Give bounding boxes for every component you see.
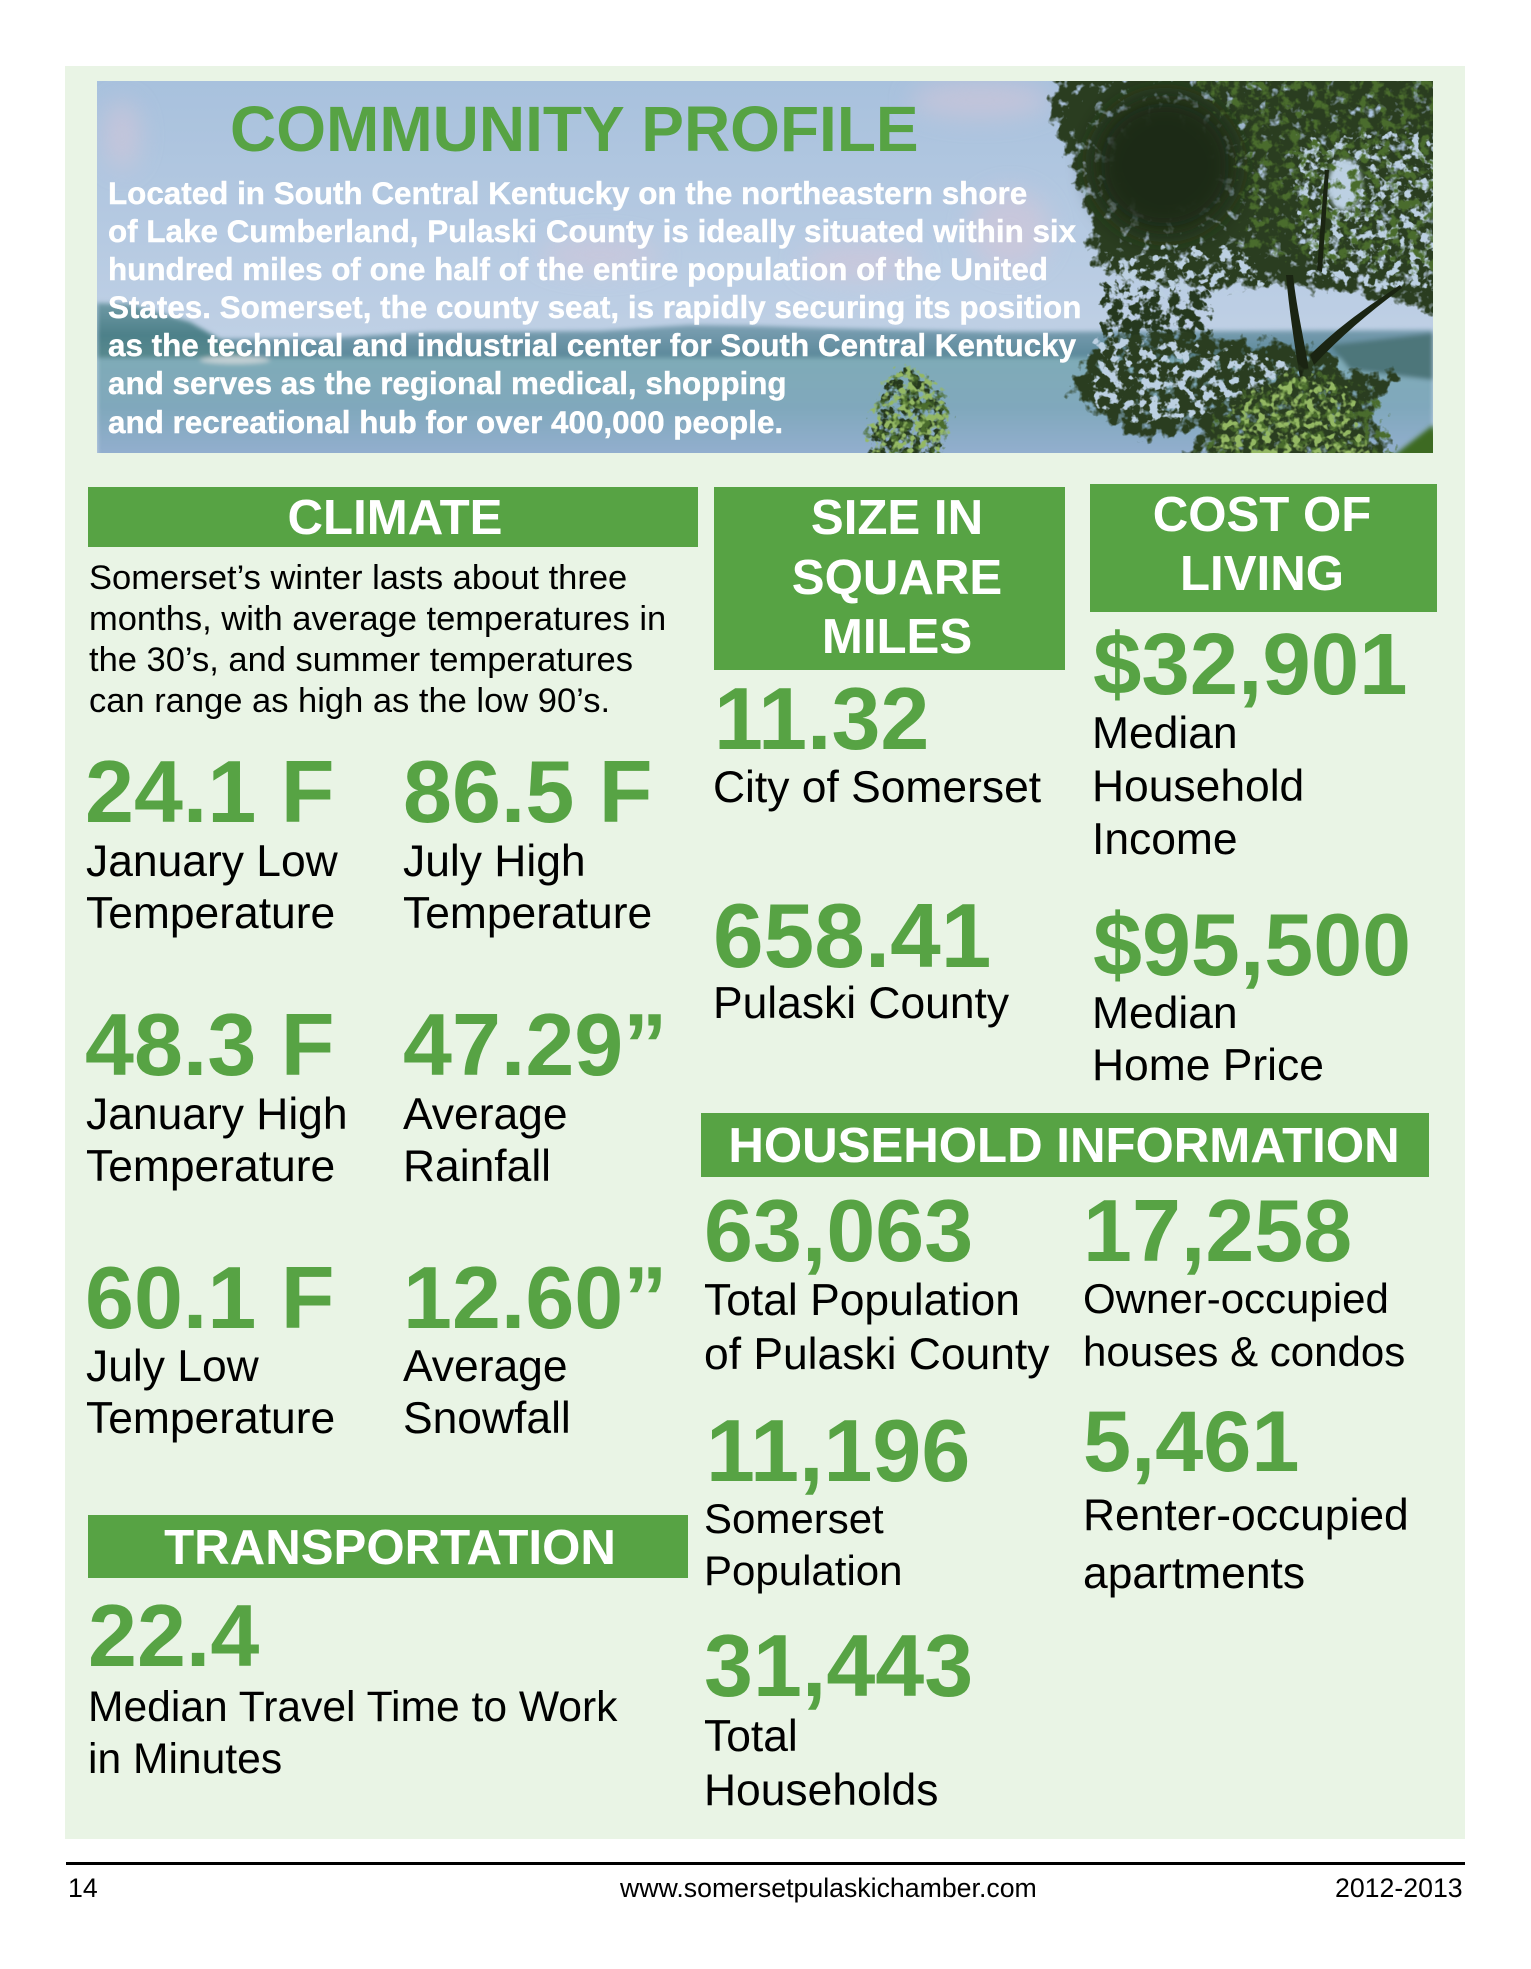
banner photo: lake and tree	[97, 81, 1433, 453]
stat: January high	[85, 995, 348, 1191]
intro paragraph	[108, 176, 1081, 440]
stat: total population: 63,063	[704, 1181, 973, 1280]
heading: cost of living: LIVING	[1180, 546, 1344, 601]
stat: owner-occupied: 17,258	[1083, 1181, 1352, 1280]
stat: July high: Temperature	[403, 889, 652, 938]
stat: travel time: in Minutes	[88, 1735, 282, 1783]
stat: July low: 60.1 F	[85, 1248, 334, 1347]
stat: household income	[1092, 616, 1407, 864]
stat: total households	[704, 1616, 973, 1815]
stat: total households: 31,443	[704, 1616, 973, 1715]
stat: July low	[85, 1248, 335, 1443]
stat: total population: of Pulaski County	[704, 1330, 1050, 1379]
heading: household information: HOUSEHOLD INFORMATION	[728, 1118, 1400, 1173]
footer: 2012-2013	[1335, 1873, 1463, 1903]
stat: Somerset population	[704, 1401, 970, 1594]
stat: January low	[85, 742, 339, 938]
stat: January low: 24.1 F	[85, 742, 334, 841]
stat: snowfall: 12.60”	[403, 1248, 667, 1347]
stat: January low: January Low	[86, 837, 339, 886]
stat: city size: City of Somerset	[713, 763, 1042, 812]
stat: July low: July Low	[86, 1342, 260, 1391]
stat: January high: 48.3 F	[85, 995, 334, 1094]
heading: climate	[88, 487, 698, 547]
stat: household income: Household	[1092, 762, 1304, 811]
stat: renter-occupied	[1083, 1394, 1409, 1598]
heading: size in square miles	[714, 487, 1065, 670]
stat: city size: 11.32	[714, 669, 929, 768]
intro paragraph: of Lake Cumberland, Pulaski County is ideally situated within six	[108, 214, 1077, 249]
stat: snowfall	[403, 1248, 667, 1443]
small tree	[862, 364, 956, 453]
stat: owner-occupied: houses & condos	[1083, 1328, 1405, 1375]
stat: home price: Home Price	[1092, 1041, 1324, 1090]
stat: July high	[403, 742, 652, 938]
stat: rainfall: 47.29”	[403, 995, 667, 1094]
heading: transportation	[88, 1515, 688, 1578]
tree crown	[1046, 81, 1433, 444]
stat: January high: January High	[86, 1090, 348, 1139]
heading: transportation: TRANSPORTATION	[164, 1520, 616, 1575]
heading: size in square miles: SIZE IN	[811, 490, 983, 545]
stat: Somerset population: Population	[704, 1547, 902, 1594]
footer	[66, 1862, 1465, 1903]
stat: total population	[704, 1181, 1050, 1379]
stat: travel time: Median Travel Time to Work	[88, 1683, 618, 1731]
stat: total households: Households	[704, 1766, 938, 1815]
stat: renter-occupied: Renter-occupied	[1083, 1491, 1409, 1540]
intro paragraph: Located in South Central Kentucky on the northeastern shore	[108, 176, 1027, 211]
stat: county size: Pulaski County	[713, 979, 1010, 1028]
intro paragraph: and recreational hub for over 400,000 people.	[108, 405, 783, 440]
footer: 14	[68, 1873, 98, 1903]
climate description: can range as high as the low 90’s.	[89, 682, 610, 720]
stat: owner-occupied	[1083, 1181, 1405, 1375]
stat: household income: Median	[1092, 709, 1238, 758]
stat: travel time: 22.4	[88, 1586, 259, 1685]
climate description: the 30’s, and summer temperatures	[89, 641, 633, 679]
stat: total households: Total	[704, 1712, 798, 1761]
stat: July high: 86.5 F	[403, 742, 652, 841]
heading: cost of living: COST OF	[1153, 487, 1371, 542]
intro paragraph: as the technical and industrial center for South Central Kentucky	[108, 328, 1077, 363]
footer: www.somersetpulaskichamber.com	[619, 1873, 1037, 1903]
stat: household income: Income	[1092, 815, 1238, 864]
climate description	[89, 559, 666, 720]
stat: Somerset population: 11,196	[706, 1401, 970, 1500]
stat: home price	[1092, 895, 1411, 1090]
intro paragraph: hundred miles of one half of the entire population of the United	[108, 252, 1048, 287]
tree bush	[1181, 365, 1433, 453]
intro paragraph: States. Somerset, the county seat, is rapidly securing its position	[108, 290, 1081, 325]
heading: cost of living	[1090, 484, 1437, 612]
stat: household income: $32,901	[1093, 616, 1407, 713]
stat: rainfall	[403, 995, 667, 1191]
stat: rainfall: Rainfall	[403, 1142, 551, 1191]
stat: renter-occupied: apartments	[1083, 1549, 1305, 1598]
climate description: Somerset’s winter lasts about three	[89, 559, 627, 597]
stat: July high: July High	[403, 837, 586, 886]
stat: city size	[713, 669, 1042, 812]
climate description: months, with average temperatures in	[89, 600, 666, 638]
stat: snowfall: Average	[403, 1342, 568, 1391]
stat: home price: Median	[1092, 989, 1238, 1038]
stat: Somerset population: Somerset	[704, 1495, 884, 1542]
stat: county size: 658.41	[713, 886, 991, 987]
stat: owner-occupied: Owner-occupied	[1083, 1275, 1389, 1322]
stat: snowfall: Snowfall	[403, 1394, 571, 1443]
stat: July low: Temperature	[86, 1394, 335, 1443]
heading: climate: CLIMATE	[288, 490, 502, 545]
stat: home price: $95,500	[1093, 895, 1411, 994]
heading: size in square miles: MILES	[822, 609, 972, 664]
intro paragraph: and serves as the regional medical, shopping	[108, 366, 787, 401]
stat: rainfall: Average	[403, 1090, 568, 1139]
stat: renter-occupied: 5,461	[1083, 1394, 1299, 1490]
title: COMMUNITY PROFILE	[230, 93, 919, 165]
stat: January high: Temperature	[86, 1142, 335, 1191]
heading: size in square miles: SQUARE	[792, 550, 1002, 605]
stat: January low: Temperature	[86, 889, 335, 938]
stat: travel time	[88, 1586, 618, 1783]
stat: total population: Total Population	[704, 1276, 1020, 1325]
stat: county size	[713, 886, 1010, 1028]
